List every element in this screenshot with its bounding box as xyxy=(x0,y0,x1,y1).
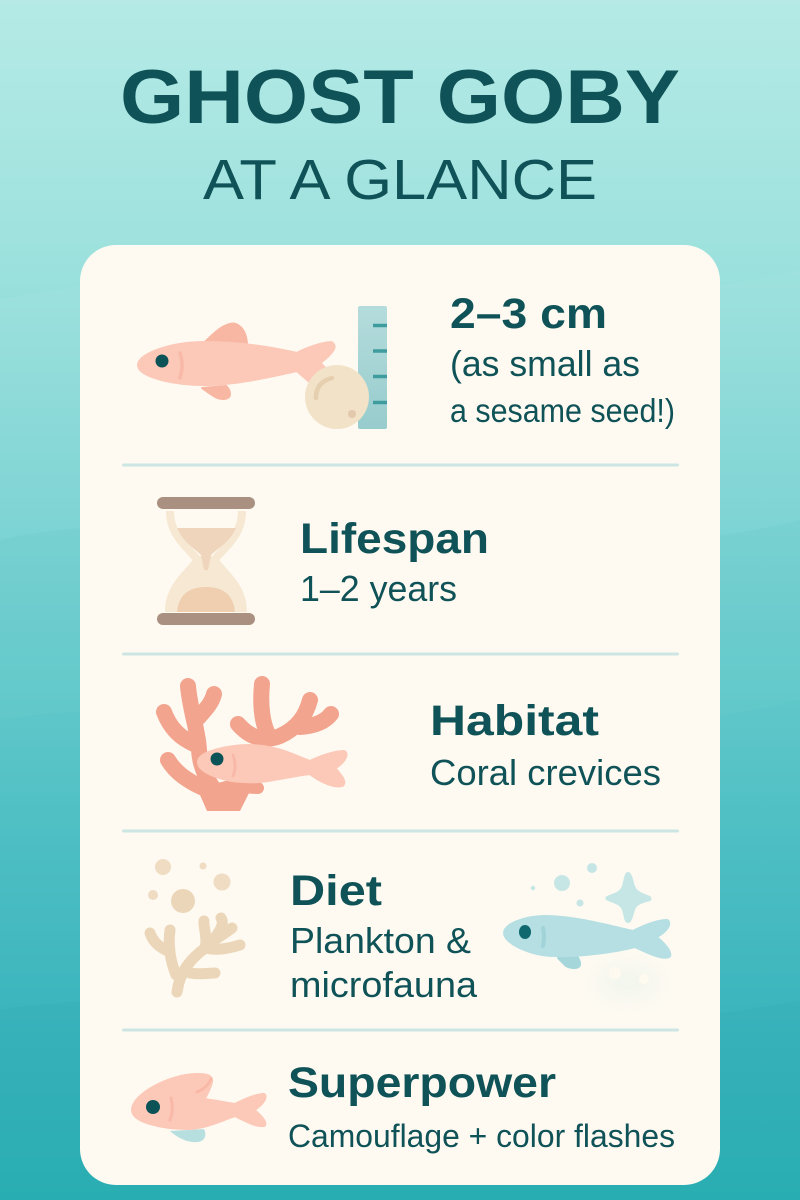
text: lifespan: 1–2 years xyxy=(300,568,457,609)
text: superpower xyxy=(288,1059,675,1154)
text: lifespan: Lifespan xyxy=(300,515,489,563)
icon: coral with fish xyxy=(164,684,346,811)
text: size: (as small as xyxy=(450,343,640,384)
text: diet: Diet xyxy=(290,867,382,915)
icon: pink fish with blue fin xyxy=(133,1075,265,1142)
text: superpower: Camouflage + color flashes xyxy=(288,1118,675,1154)
icon: hourglass xyxy=(157,497,255,625)
text: superpower: Superpower xyxy=(288,1059,556,1107)
icon: blue fish with sparkle xyxy=(505,863,669,998)
text: size xyxy=(450,290,675,429)
text: size: 2–3 cm xyxy=(450,290,607,338)
text: habitat: Coral crevices xyxy=(430,752,661,793)
text: diet xyxy=(290,867,478,1005)
text: habitat xyxy=(430,697,661,793)
title: AT A GLANCE xyxy=(203,148,597,212)
text: size: a sesame seed!) xyxy=(450,392,675,429)
text: diet: microfauna xyxy=(290,964,478,1005)
panel: facts card xyxy=(80,245,720,1185)
text: lifespan xyxy=(300,515,489,609)
icon: plankton and beige coral xyxy=(148,859,240,992)
text: diet: Plankton & xyxy=(290,920,471,961)
title: GHOST GOBY xyxy=(120,55,680,140)
icon: fish with ruler and sesame seed xyxy=(139,306,387,429)
text: habitat: Habitat xyxy=(430,697,599,745)
title xyxy=(120,55,680,212)
